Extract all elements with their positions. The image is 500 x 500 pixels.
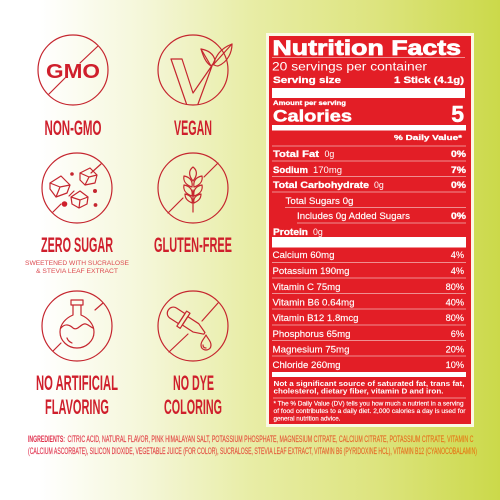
vitamin and mineral rows: Chloride 260mg [272, 360, 340, 370]
macronutrient rows [272, 146, 466, 237]
note: not a significant source: cholesterol, dietary fiber, vitamin D and iron. [274, 386, 444, 396]
macronutrient rows: 0% [451, 180, 466, 190]
heading: no artificial flavoring: NO ARTIFICIAL [36, 371, 118, 395]
icon: non-GMO badge [38, 35, 108, 105]
vitamin and mineral rows: 80% [446, 313, 464, 323]
vitamin and mineral rows: 40% [446, 298, 464, 308]
daily value header: % Daily Value* [394, 133, 462, 142]
macronutrient rows: 0g [324, 149, 334, 159]
icon: gluten-free badge [158, 153, 228, 223]
vitamin and mineral rows: Vitamin B6 0.64mg [272, 298, 354, 308]
macronutrient rows: Total Sugars 0g [286, 196, 354, 206]
heading: no dye coloring: COLORING [164, 395, 222, 419]
macronutrient rows: Includes 0g Added Sugars [297, 211, 411, 221]
note: not a significant source: Not a significant source of saturated fat, trans fat, [274, 379, 464, 388]
macronutrient rows: 0% [451, 149, 466, 159]
heading: no dye coloring: NO DYE [173, 371, 214, 395]
servings: 1 Stick (4.1g) [394, 75, 464, 85]
macronutrient rows: Sodium [273, 165, 308, 175]
macronutrient rows: 0g [374, 180, 384, 190]
servings [272, 62, 464, 85]
vitamin and mineral rows: 10% [446, 360, 464, 370]
macronutrient rows: Protein [273, 227, 308, 237]
footnote: daily value [274, 400, 466, 422]
text: sweetener note: & STEVIA LEAF EXTRACT [36, 269, 118, 275]
note: not a significant source [274, 379, 464, 396]
vitamin and mineral rows: Potassium 190mg [272, 266, 350, 276]
footnote: daily value: general nutrition advice. [274, 416, 341, 422]
vitamin and mineral rows: 6% [451, 329, 464, 339]
macronutrient rows: 0g [313, 227, 323, 237]
calories: Amount per serving [273, 100, 346, 107]
text: ingredients [28, 434, 477, 457]
calories: 5 [451, 101, 464, 127]
text: ingredients: INGREDIENTS: [28, 434, 65, 445]
vitamin and mineral rows: Calcium 60mg [272, 250, 334, 260]
vitamin and mineral rows: Magnesium 75mg [272, 344, 350, 354]
icon: no dye coloring badge [158, 291, 228, 361]
vitamin and mineral rows: 20% [446, 344, 464, 354]
footnote: daily value: * The % Daily Value (DV) tells you how much a nutrient in a serving [274, 400, 464, 408]
vitamin and mineral rows: 80% [446, 282, 464, 292]
heading: gluten-free: GLUTEN-FREE [154, 233, 232, 257]
icon: zero sugar badge [42, 153, 112, 223]
title: Nutrition Facts [272, 37, 461, 60]
icon: non-GMO badge: GMO [46, 61, 100, 83]
heading: no dye coloring [164, 371, 222, 419]
macronutrient rows: 0% [451, 211, 466, 221]
macronutrient rows: 7% [451, 165, 466, 175]
heading: no artificial flavoring: FLAVORING [45, 395, 109, 419]
heading: zero sugar: ZERO SUGAR [41, 233, 113, 257]
heading: non-GMO: NON-GMO [44, 116, 102, 140]
calories [273, 100, 464, 127]
servings: 20 servings per container [272, 62, 427, 74]
icon: no artificial flavoring badge [42, 291, 112, 361]
vitamin and mineral rows: Vitamin B12 1.8mcg [272, 313, 358, 323]
vitamin and mineral rows: Phosphorus 65mg [272, 329, 350, 339]
vitamin and mineral rows: 4% [451, 266, 464, 276]
text: sweetener note: SWEETENED WITH SUCRALOSE [25, 261, 129, 267]
footnote: daily value: of food contributes to a daily diet. 2,000 calories a day is used for [274, 408, 466, 415]
vitamin and mineral rows: Vitamin C 75mg [272, 282, 340, 292]
panel: nutrition facts [266, 33, 474, 427]
servings: Serving size [273, 75, 341, 85]
vitamin and mineral rows [272, 250, 466, 370]
macronutrient rows: Total Fat [273, 149, 319, 159]
text: VEGAN [174, 116, 212, 140]
macronutrient rows: Total Carbohydrate [273, 180, 369, 190]
calories: Calories [273, 106, 352, 126]
macronutrient rows: 170mg [313, 165, 342, 175]
icon: vegan badge [158, 35, 232, 105]
vitamin and mineral rows: 4% [451, 250, 464, 260]
text: sweetener note [25, 261, 129, 275]
heading: no artificial flavoring [36, 371, 118, 419]
